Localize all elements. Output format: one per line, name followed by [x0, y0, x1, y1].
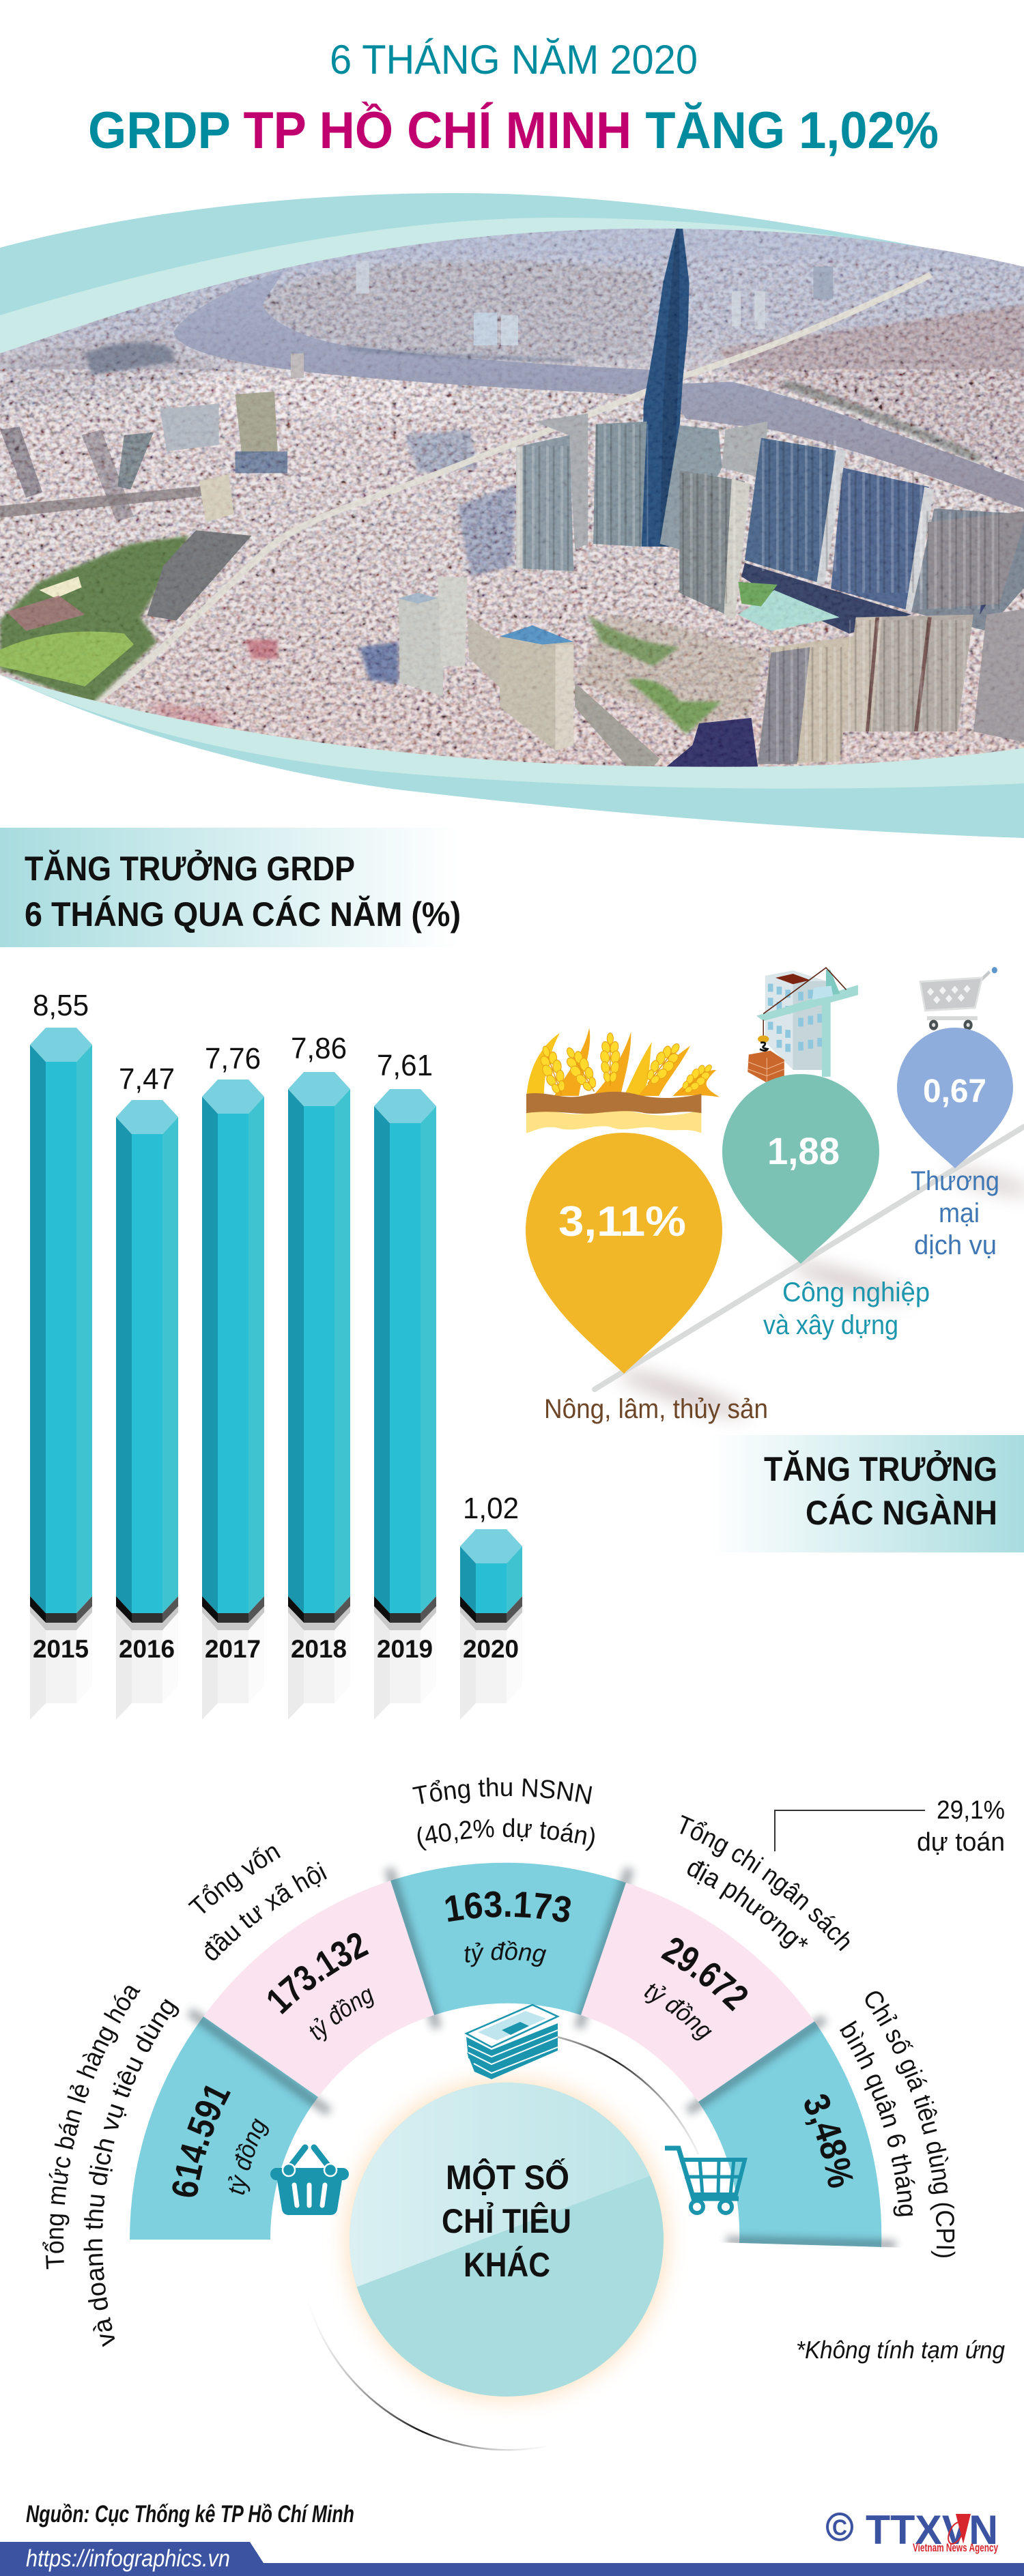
value: retail sales	[164, 2077, 272, 2201]
value: social investment: 173.132	[268, 1933, 369, 2014]
label: agriculture: Nông, lâm, thủy sản	[544, 1394, 768, 1424]
highway bridge	[91, 274, 931, 704]
blue shadowed towers	[745, 438, 842, 583]
left towers	[160, 403, 219, 452]
callout: 29,1% of estimate	[775, 1796, 1005, 1857]
bar 2015: 8,55	[33, 989, 89, 1022]
callout: 29,1% of estimate: 29,1%	[937, 1796, 1005, 1825]
value: retail sales: tỷ đồng	[228, 2118, 269, 2195]
label: state budget revenue: (40,2% dự toán)	[418, 1818, 595, 1851]
label: local budget spending: địa phương*	[682, 1853, 814, 1959]
pink arc segments	[203, 1881, 434, 2097]
icon: shopping cart	[665, 2148, 745, 2213]
drop: trade and services 0,67	[897, 1028, 1013, 1168]
drop: agriculture 3,11%	[526, 1133, 722, 1374]
label: state budget revenue	[411, 1774, 599, 1853]
footer bar with URL: https://infographics.vn	[26, 2545, 230, 2572]
bar 2020	[460, 1492, 522, 1720]
main title: GRDP TP HỒ CHÍ MINH TĂNG 1,02%	[88, 102, 939, 160]
dark streets and canals	[0, 427, 42, 497]
value: local budget spending	[640, 1928, 756, 2044]
centre circle: other indicators: CHỈ TIÊU	[442, 2202, 571, 2240]
photo: aerial view of Ho Chi Minh City skyline drawn with shapes	[0, 218, 1024, 772]
label: CPI: bình quân 6 tháng	[834, 2017, 922, 2218]
bar 2019: 7,61	[377, 1049, 433, 1082]
footer bar with URL	[0, 2542, 1024, 2576]
icon: shopping cart above blue drop	[920, 967, 997, 1030]
bar 2020: 2020	[463, 1635, 519, 1663]
label: retail sales: Tổng mức bán lẻ hàng hóa	[42, 1986, 141, 2270]
heading banner: sector growth: TĂNG TRƯỞNG	[764, 1449, 997, 1488]
heading banner: sector growth: CÁC NGÀNH	[806, 1494, 997, 1532]
central residential towers	[535, 414, 588, 549]
dark peninsula rim and river banks	[348, 348, 575, 360]
drop: trade and services 0,67: 0,67	[923, 1073, 986, 1110]
drop: agriculture 3,11%: 3,11%	[558, 1198, 686, 1245]
haze at the top	[209, 229, 1014, 288]
bar 2018	[288, 1032, 350, 1720]
value: state budget revenue	[441, 1884, 575, 1968]
icon: wheat field and soil	[526, 1028, 720, 1133]
icon: shopping basket	[270, 2147, 349, 2215]
label: social investment: đầu tư xã hội	[205, 1862, 327, 1960]
park and lake at lower left	[0, 536, 190, 704]
cream towers lower right	[843, 615, 973, 732]
centre circle: other indicators: KHÁC	[464, 2246, 550, 2284]
bar 2016: 2016	[119, 1635, 175, 1663]
value: state budget revenue: 163.173	[445, 1892, 571, 1922]
logo: TTXVN: C	[832, 2515, 847, 2540]
drop: industry and construction 1,88	[722, 1074, 879, 1264]
label: trade and services: Thương	[911, 1166, 999, 1196]
bar 2016: 7,47	[119, 1062, 175, 1096]
segment edge shadows	[190, 1868, 896, 2245]
drop: industry and construction 1,88: 1,88	[767, 1129, 840, 1172]
label: CPI: Chỉ số giá tiêu dùng (CPI)	[857, 1985, 959, 2259]
bar 2019: 2019	[377, 1635, 433, 1663]
bar chart: GRDP growth by year	[30, 989, 522, 1720]
value: local budget spending: tỷ đồng	[640, 1976, 719, 2044]
icon: building and crane	[748, 968, 858, 1083]
label: industry and construction: và xây dựng	[763, 1310, 898, 1340]
label: state budget revenue: Tổng thu NSNN	[412, 1778, 593, 1804]
callout: 29,1% of estimate: dự toán	[917, 1828, 1005, 1857]
bar 2015	[30, 989, 92, 1720]
thin orbit arcs around centre	[307, 2036, 698, 2450]
bar 2018: 2018	[291, 1635, 347, 1663]
tower window stripes	[516, 424, 999, 762]
value: state budget revenue: tỷ đồng	[461, 1937, 547, 1968]
hero photo with teal swoosh frame	[0, 193, 1024, 838]
logo: TTXVN: TTXVN	[866, 2507, 998, 2553]
icon: banknote stacks	[466, 2005, 558, 2079]
title block	[88, 37, 939, 160]
sector growth rising line with shadows	[595, 1127, 1024, 1422]
bar 2017: 7,76	[205, 1042, 261, 1075]
value: retail sales: 614.591	[172, 2085, 231, 2197]
bar 2018: 7,86	[291, 1032, 347, 1065]
bar 2017: 2017	[205, 1635, 261, 1663]
label: retail sales	[41, 1978, 183, 2349]
low-rise cluster with green	[575, 615, 765, 729]
bar 2020: 1,02	[463, 1492, 519, 1525]
footnote: *Không tính tạm ứng	[796, 2336, 1005, 2364]
heading banner: GRDP growth: 6 THÁNG QUA CÁC NĂM (%)	[25, 895, 461, 934]
label: social investment: Tổng vốn	[188, 1847, 281, 1913]
landmark tower	[642, 229, 689, 547]
label: industry and construction	[763, 1277, 930, 1340]
swoosh: inner pale band	[0, 218, 1024, 789]
semicircle indicator panel	[130, 1863, 908, 2276]
label: local budget spending: Tổng chi ngân sách	[672, 1810, 858, 1956]
swoosh: outer teal band	[0, 193, 1024, 838]
fine grain over the whole photo	[0, 218, 1024, 772]
bar 2016	[116, 1062, 178, 1720]
centre circle: other indicators	[341, 2074, 669, 2402]
white mask below the last segment	[717, 2242, 908, 2276]
label: industry and construction: Công nghiệp	[782, 1277, 930, 1307]
centre circle: other indicators: MỘT SỐ	[446, 2158, 569, 2197]
heading banner: sector growth	[710, 1435, 1024, 1552]
value: CPI: 3,48%	[795, 2088, 862, 2191]
value: local budget spending: 29.672	[656, 1928, 756, 2018]
far peninsula and far bank	[261, 261, 653, 359]
source line: Nguồn: Cục Thống kê TP Hồ Chí Minh	[26, 2501, 354, 2528]
bar 2015: 2015	[33, 1635, 89, 1663]
label: trade and services	[911, 1166, 999, 1260]
beige towers lower centre	[399, 596, 444, 696]
bar 2017	[202, 1042, 264, 1720]
river	[174, 271, 1024, 508]
blue arc segments	[130, 2016, 318, 2240]
value: social investment: tỷ đồng	[310, 1988, 374, 2042]
bright mid-distance blocks	[199, 375, 448, 415]
label: trade and services: mại	[939, 1198, 980, 1228]
bar 2019	[374, 1049, 436, 1720]
heading banner: GRDP growth: TĂNG TRƯỞNG GRDP	[25, 849, 355, 888]
shadow below towers	[741, 563, 911, 634]
subtitle: 6 tháng năm 2020: 6 THÁNG NĂM 2020	[330, 37, 698, 83]
label: trade and services: dịch vụ	[914, 1230, 997, 1260]
heading banner: GRDP growth	[0, 828, 461, 947]
label: retail sales: và doanh thu dịch vụ tiêu dùng	[83, 1999, 179, 2347]
